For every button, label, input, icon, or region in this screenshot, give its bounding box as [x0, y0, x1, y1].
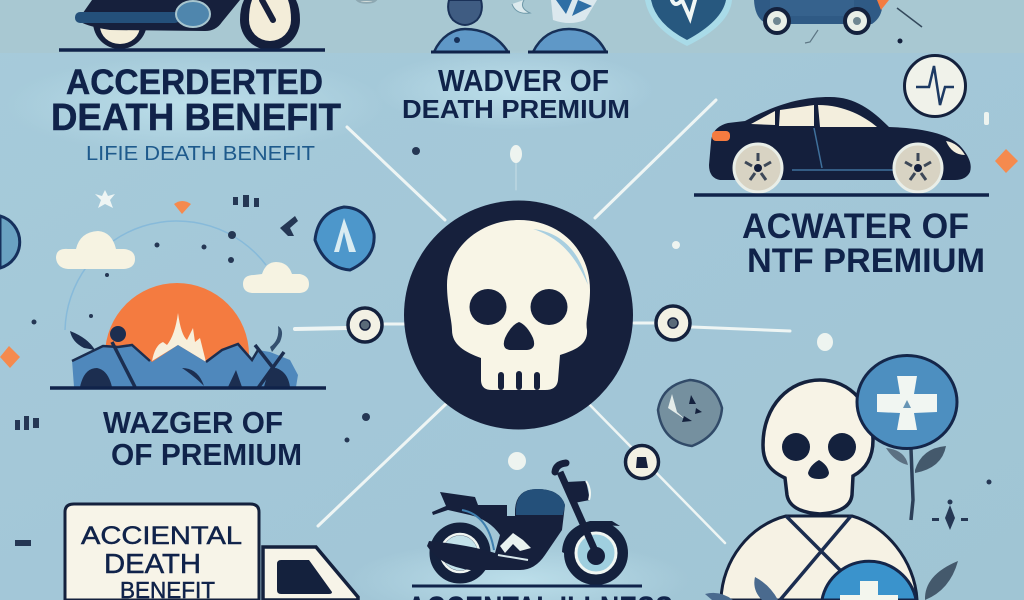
icon: left node ring	[348, 308, 382, 342]
icon: large black car	[694, 97, 989, 195]
heading: waiver of premium left	[103, 405, 302, 472]
icon: orange sparkle right	[995, 149, 1018, 173]
heading: waiver of premium right: ACWATER OF	[742, 207, 969, 246]
illustration: sun, clouds and rubble	[50, 220, 326, 390]
icon: delivery truck	[65, 504, 358, 600]
icon: heartbeat ring	[904, 56, 966, 116]
heading: accelerated death benefit	[51, 63, 341, 139]
truck label: DEATH	[104, 548, 201, 579]
icon: right node ring	[656, 306, 690, 340]
icon: shield	[645, 0, 732, 46]
illustration: skeleton figure	[705, 380, 917, 600]
panel: central skull badge	[404, 200, 633, 430]
truck label: ACCIENTAL	[81, 522, 242, 550]
icon: blue medical cross badge	[857, 356, 957, 448]
heading: accelerated death benefit: DEATH BENEFIT	[51, 97, 341, 139]
icon: lower blue cross badge	[822, 561, 916, 600]
icon: grey round badge	[658, 380, 722, 446]
icon: bottom motorcycle	[412, 463, 642, 586]
icon: flower stem with leaves	[886, 446, 946, 520]
scattered debris marks	[15, 147, 420, 546]
truck label	[81, 522, 242, 600]
icon: two people at top	[431, 0, 608, 52]
heading: waiver of death premium: WADVER OF	[438, 63, 609, 98]
icon: orange diamond top	[174, 201, 191, 214]
heading: waiver of premium left: WAZGER OF	[103, 405, 283, 440]
heading: waiver of premium left: OF PREMIUM	[111, 437, 302, 472]
subheading: life death benefit: LIFIE DEATH BENEFIT	[86, 143, 315, 165]
heading: waiver of premium right	[742, 207, 985, 280]
small speck marks right	[932, 480, 992, 530]
icon: small car at top	[754, 0, 922, 44]
connector lines	[295, 100, 790, 543]
heading: waiver of death premium: DEATH PREMIUM	[402, 94, 630, 124]
icon: orange sparkle left	[0, 346, 20, 368]
icon: lower leaf	[925, 561, 958, 600]
icon: small ring at top	[357, 0, 376, 3]
heading: waiver of premium right: NTF PREMIUM	[747, 242, 985, 280]
heading: accelerated death benefit: ACCERDERTED	[66, 63, 323, 102]
icon: white drops	[508, 112, 989, 470]
icon: lower node ring	[626, 446, 658, 478]
icon: white star	[95, 190, 115, 208]
icon: blue badge at left edge	[0, 216, 20, 268]
heading: waiver of death premium	[402, 63, 630, 124]
icon: top motorcycle	[59, 0, 325, 50]
icon: blue badge left	[315, 207, 374, 270]
